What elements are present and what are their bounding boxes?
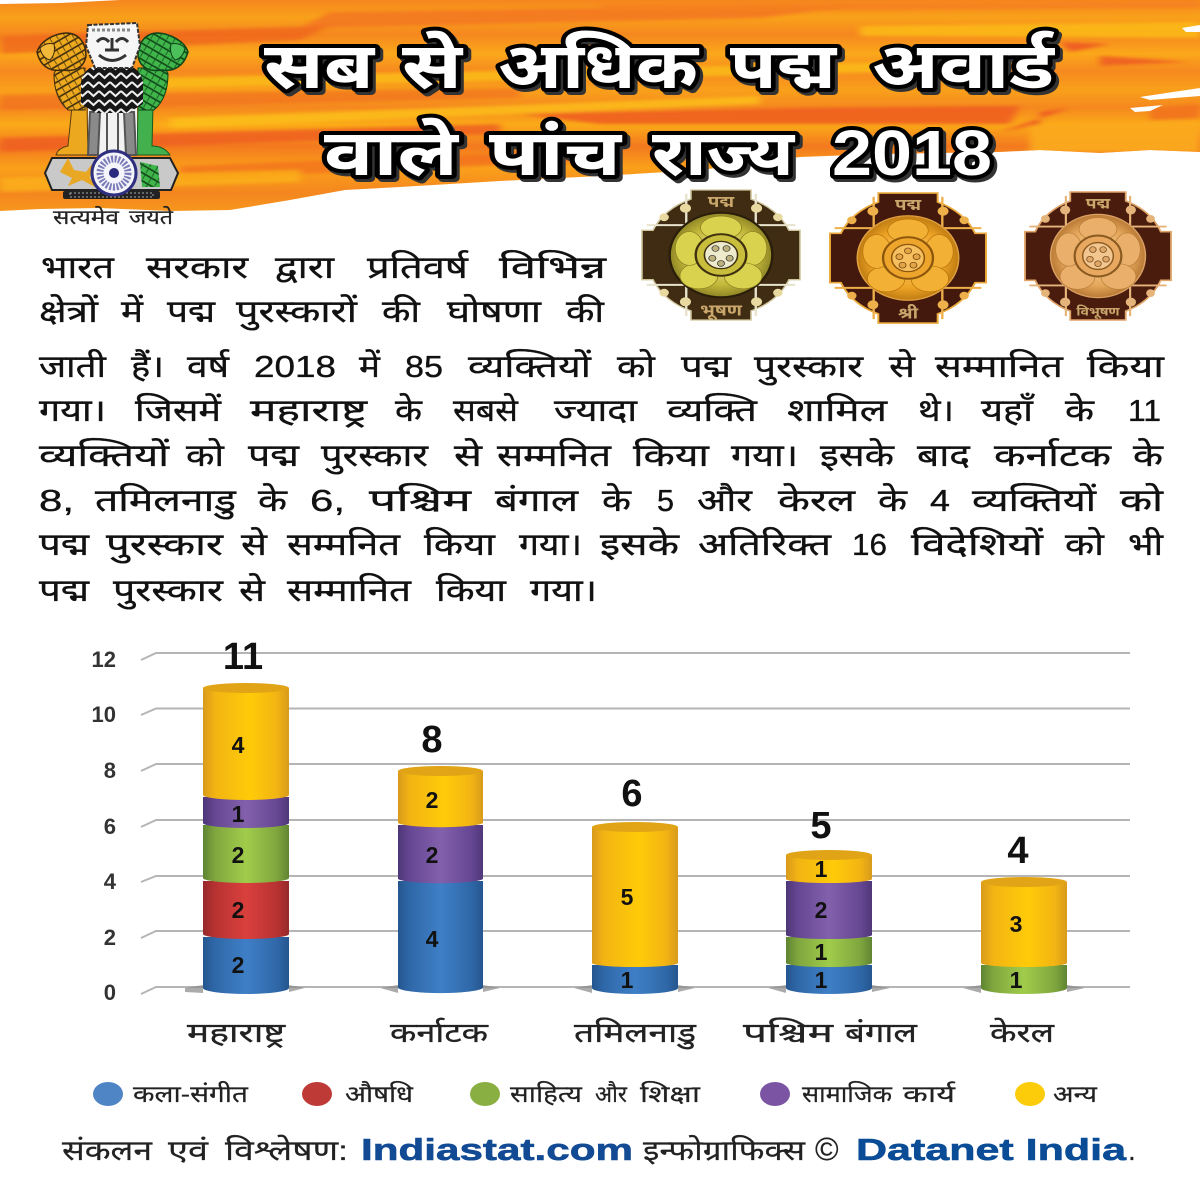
text block: introduction paragraph: के: [258, 483, 288, 518]
text block: introduction paragraph: किया: [633, 438, 710, 473]
segment value labels: 1: [815, 939, 828, 965]
segment value labels: 3: [1010, 911, 1022, 937]
text block: introduction paragraph: व्यक्तियों: [39, 438, 170, 473]
footer credit: Indiastat.com: [361, 1132, 633, 1167]
text block: introduction paragraph: 5: [657, 483, 674, 518]
y axis labels: 4: [104, 869, 117, 894]
text block: introduction paragraph: से: [454, 438, 483, 473]
segment value labels: 2: [815, 897, 827, 923]
icon: padma shri medal: पद्म: [895, 195, 922, 214]
segment value labels: 4: [232, 732, 245, 758]
total value labels: 4: [1007, 830, 1029, 872]
y axis labels: [92, 647, 117, 1005]
y axis labels: 2: [104, 925, 116, 950]
text block: introduction paragraph: के: [1065, 393, 1095, 428]
text block: introduction paragraph: शामिल: [787, 393, 888, 428]
text block: introduction paragraph: पुरस्कार: [754, 349, 865, 385]
drum base with wheel: [45, 151, 178, 199]
text block: introduction paragraph: से: [239, 573, 266, 608]
total value labels: 5: [810, 805, 832, 847]
text block: introduction paragraph: वर्ष: [187, 349, 230, 384]
text block: introduction paragraph: को: [1120, 483, 1164, 518]
text block: introduction paragraph: और: [697, 483, 754, 518]
text block: introduction paragraph: हैं।: [131, 349, 164, 384]
segment value labels: 5: [621, 884, 634, 910]
footer credit: इन्फोग्राफिक्स: [643, 1134, 806, 1166]
text block: introduction paragraph: 8,: [39, 483, 74, 518]
segment value labels: 2: [426, 842, 438, 868]
text block: introduction paragraph: किया: [436, 573, 507, 608]
legend: literature and education: [470, 1081, 701, 1107]
text block: introduction paragraph: की: [382, 294, 421, 329]
text block: introduction paragraph: से: [241, 527, 268, 562]
x axis state labels: बंगाल: [845, 1018, 918, 1048]
text block: introduction paragraph: बाद: [917, 438, 971, 473]
text block: introduction paragraph: विभिन्न: [499, 250, 608, 285]
segment value labels: 2: [232, 897, 244, 923]
right lion: [137, 33, 188, 155]
text block: introduction paragraph: गया।: [530, 573, 597, 608]
footer credit: Datanet India: [856, 1132, 1127, 1167]
text block: introduction paragraph: पद्म: [39, 573, 91, 608]
text block: introduction paragraph: इसके: [820, 438, 895, 473]
emblem motto: जयते: [129, 205, 174, 229]
text block: introduction paragraph: पुरस्कार: [113, 573, 225, 609]
icon: padma shri medal: [830, 193, 986, 323]
text block: introduction paragraph: व्यक्ति: [667, 393, 759, 428]
text block: introduction paragraph: जाती: [39, 349, 107, 384]
legend: [93, 1081, 1098, 1107]
text block: introduction paragraph: के: [1133, 438, 1164, 473]
legend: art and music: कला-संगीत: [133, 1081, 249, 1107]
bar: kerala: [981, 877, 1067, 994]
icon: padma bhushan medal: भूषण: [700, 301, 743, 321]
text block: introduction paragraph: सम्मानित: [287, 573, 413, 608]
text block: introduction paragraph: यहाँ: [981, 393, 1035, 428]
footer credit: .: [1128, 1135, 1136, 1166]
legend: other: अन्य: [1053, 1081, 1098, 1107]
legend: literature and education: शिक्षा: [640, 1081, 701, 1107]
text block: introduction paragraph: सबसे: [453, 393, 519, 428]
emblem motto: सत्यमेव: [53, 205, 120, 229]
text block: introduction paragraph: गया।: [39, 393, 106, 428]
x axis state labels: पश्चिम: [743, 1018, 834, 1048]
text block: introduction paragraph: 6,: [310, 483, 345, 518]
text block: introduction paragraph: तमिलनाडु: [95, 483, 237, 519]
icon: padma bhushan medal: पद्म: [708, 193, 735, 210]
legend: literature and education: साहित्य: [510, 1081, 583, 1107]
text block: introduction paragraph: पुरस्कारों: [236, 294, 358, 330]
total value labels: 11: [223, 636, 263, 678]
legend: social work: कार्य: [903, 1081, 956, 1107]
legend: other: [1015, 1081, 1098, 1107]
text block: introduction paragraph: विदेशियों: [911, 527, 1044, 562]
title: [264, 30, 1056, 189]
y axis labels: 10: [92, 702, 116, 727]
text block: introduction paragraph: किया: [1087, 349, 1165, 384]
text block: introduction paragraph: से: [889, 349, 916, 384]
legend: medicine: [302, 1081, 414, 1107]
title: 2018: [832, 117, 992, 189]
bar: maharashtra: [203, 683, 289, 994]
icon: padma bhushan medal: [642, 190, 800, 321]
text block: introduction paragraph: सम्मनित: [287, 527, 402, 562]
text block: introduction paragraph: को: [617, 349, 656, 384]
text block: introduction paragraph: ज्यादा: [554, 393, 638, 428]
text block: introduction paragraph: 16: [852, 527, 887, 562]
text block: introduction paragraph: पद्म: [167, 294, 217, 329]
text block: introduction paragraph: 4: [930, 483, 950, 518]
title: पद्म: [730, 30, 837, 102]
legend: social work: [760, 1081, 956, 1107]
text block: introduction paragraph: घोषणा: [447, 294, 542, 329]
title: राज्य: [652, 117, 796, 189]
text block: introduction paragraph: को: [186, 438, 225, 473]
text block: introduction paragraph: सम्मनित: [497, 438, 613, 473]
total value labels: [223, 636, 1029, 872]
text block: introduction paragraph: भारत: [41, 250, 116, 285]
text block: introduction paragraph: 2018: [254, 349, 336, 384]
legend: medicine: औषधि: [345, 1081, 414, 1107]
text block: introduction paragraph: प्रतिवर्ष: [367, 250, 469, 285]
footer credit: एवं: [168, 1135, 209, 1166]
text block: introduction paragraph: थे।: [918, 393, 954, 428]
text block: introduction paragraph: पद्म: [681, 349, 733, 384]
text block: introduction paragraph: के: [878, 483, 908, 518]
segment value labels: 1: [621, 967, 634, 993]
text block: introduction paragraph: क्षेत्रों: [39, 294, 99, 329]
text block: introduction paragraph: कर्नाटक: [994, 438, 1113, 473]
text block: introduction paragraph: के: [602, 483, 632, 518]
text block: introduction paragraph: गया।: [731, 438, 798, 473]
segment value labels: [232, 732, 1023, 993]
text block: introduction paragraph: इसके: [600, 527, 681, 562]
y axis labels: 0: [104, 980, 116, 1005]
title: सब: [264, 30, 376, 102]
x axis state labels: कर्नाटक: [390, 1017, 490, 1048]
text block: introduction paragraph: सरकार: [146, 250, 250, 285]
total value labels: 8: [421, 719, 443, 761]
text block: introduction paragraph: पद्म: [39, 527, 91, 562]
segment value labels: 1: [815, 967, 828, 993]
text block: introduction paragraph: की: [566, 294, 605, 329]
icon: padma vibhushan medal: पद्म: [1086, 196, 1111, 212]
icon: national emblem of India: [37, 23, 188, 199]
text block: introduction paragraph: पुरस्कार: [321, 438, 430, 474]
text block: introduction paragraph: भी: [1128, 527, 1164, 562]
text block: introduction paragraph: महाराष्ट्र: [250, 393, 368, 428]
icon: padma vibhushan medal: विभूषण: [1076, 304, 1120, 319]
footer credit: ©: [815, 1131, 839, 1167]
text block: introduction paragraph: बंगाल: [495, 483, 579, 518]
icon: padma shri medal: श्री: [898, 304, 919, 322]
segment value labels: 2: [232, 842, 244, 868]
title: अवार्ड: [872, 30, 1056, 102]
text block: introduction paragraph: अतिरिक्त: [698, 527, 833, 562]
centre lion: [81, 23, 143, 155]
x axis state labels: [187, 1017, 1055, 1050]
text block: introduction paragraph: पुरस्कार: [106, 527, 225, 563]
y axis labels: 8: [104, 758, 116, 783]
footer credit: विश्लेषण:: [225, 1134, 348, 1166]
chart: stacked cylinder bars by state: [92, 636, 1130, 1050]
y axis labels: 6: [104, 814, 116, 839]
text block: introduction paragraph: पद्म: [248, 438, 301, 473]
footer credit: संकलन: [62, 1135, 153, 1166]
bar: tamil nadu: [592, 822, 678, 994]
text block: introduction paragraph: व्यक्तियों: [468, 349, 592, 384]
bar: karnataka: [398, 766, 483, 993]
text block: introduction paragraph: को: [1065, 527, 1105, 562]
segment value labels: 1: [1010, 967, 1023, 993]
text block: introduction paragraph: केरल: [778, 483, 856, 518]
text block: introduction paragraph: द्वारा: [275, 250, 335, 285]
text block: introduction paragraph: 85: [405, 349, 443, 384]
x axis state labels: केरल: [990, 1017, 1055, 1048]
total value labels: 6: [621, 773, 643, 815]
icon: padma vibhushan medal: [1025, 192, 1171, 320]
title: से: [402, 30, 464, 102]
x axis state labels: तमिलनाडु: [574, 1018, 697, 1050]
y axis labels: 12: [92, 647, 116, 672]
segment value labels: 1: [815, 856, 828, 882]
text block: introduction paragraph: [39, 250, 1165, 609]
segment value labels: 2: [232, 952, 244, 978]
text block: introduction paragraph: जिसमें: [135, 393, 222, 428]
legend: literature and education: और: [595, 1081, 628, 1107]
segment value labels: 1: [232, 801, 245, 827]
title: पांच: [489, 117, 623, 189]
banner: orange brush stroke: [0, 0, 1200, 215]
segment value labels: 2: [426, 787, 438, 813]
title: वाले: [324, 117, 460, 189]
text block: introduction paragraph: किया: [424, 527, 496, 562]
legend: social work: सामाजिक: [802, 1081, 893, 1107]
text block: introduction paragraph: के: [395, 393, 423, 428]
bar: west bengal: [786, 850, 872, 994]
left lion: [37, 33, 88, 155]
text block: introduction paragraph: में: [121, 294, 144, 329]
text block: introduction paragraph: पश्चिम: [369, 483, 472, 518]
title: अधिक: [498, 30, 700, 102]
text block: introduction paragraph: सम्मानित: [935, 349, 1065, 384]
x axis state labels: महाराष्ट्र: [187, 1018, 287, 1048]
text block: introduction paragraph: 11: [1128, 393, 1161, 428]
footer credit: [62, 1131, 1136, 1167]
segment value labels: 4: [426, 926, 439, 952]
text block: introduction paragraph: में: [359, 349, 381, 384]
text block: introduction paragraph: गया।: [519, 527, 582, 562]
text block: introduction paragraph: व्यक्तियों: [972, 483, 1097, 518]
legend: art and music: [93, 1081, 249, 1107]
